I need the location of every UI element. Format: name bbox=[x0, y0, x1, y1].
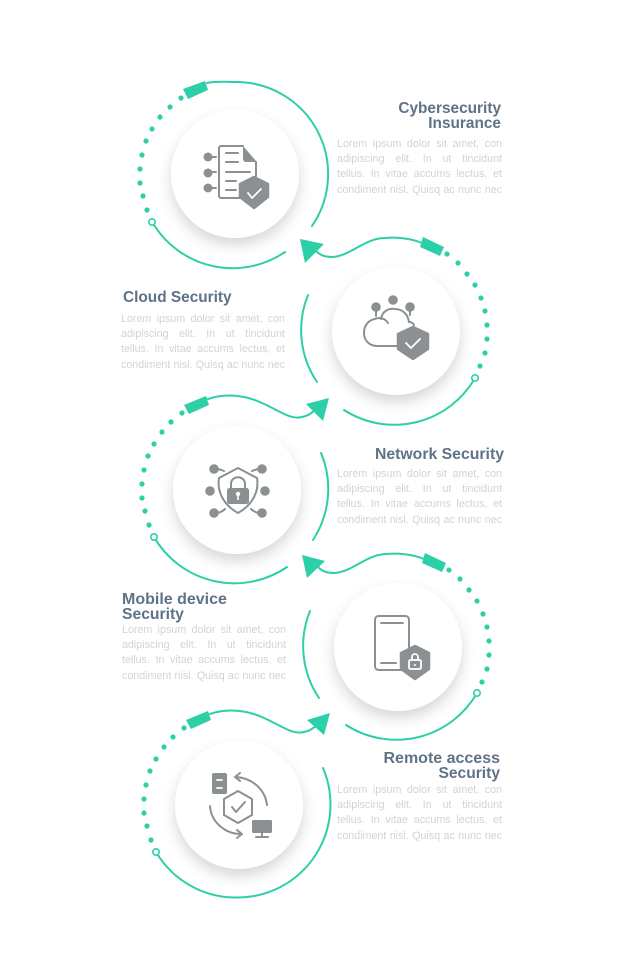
panel: cybersecurity insurance ring bbox=[137, 81, 328, 268]
text block: mobile device security: tellus. In vitae accums lectus, et bbox=[122, 654, 286, 666]
white circle bbox=[171, 110, 299, 238]
text block: cybersecurity insurance: tellus. In vitae accums lectus, et bbox=[337, 168, 502, 180]
arrow: connector to fourth ring bbox=[210, 711, 330, 735]
ring arcs bbox=[139, 396, 328, 583]
arrow: connector to first ring bbox=[300, 238, 422, 263]
panel: mobile device security ring bbox=[302, 553, 492, 740]
text block: cybersecurity insurance: condiment nisl. Quisq ac nunc nec bbox=[337, 184, 502, 196]
text block: network security: tellus. In vitae accums lectus, et bbox=[337, 498, 502, 510]
panel: cloud security ring bbox=[300, 237, 490, 425]
text block: network security bbox=[337, 466, 502, 528]
heading: cybersecurity insurance bbox=[398, 100, 501, 132]
heading: remote access security: Remote access bbox=[383, 750, 500, 767]
text block: cybersecurity insurance: Lorem ipsum dolor sit amet, con bbox=[337, 138, 502, 150]
heading: remote access security bbox=[383, 750, 500, 782]
text block: remote access security: adipiscing elit. In ut tincidunt bbox=[337, 799, 502, 811]
text block: remote access security: condiment nisl. Quisq ac nunc nec bbox=[337, 830, 502, 842]
ring arcs bbox=[137, 81, 328, 268]
white circle bbox=[175, 741, 303, 869]
panel: network security ring bbox=[139, 396, 329, 583]
text block: cybersecurity insurance: adipiscing elit. In ut tincidunt bbox=[337, 153, 502, 165]
text block: remote access security: Lorem ipsum dolor sit amet, con bbox=[337, 784, 502, 796]
text block: cloud security: Lorem ipsum dolor sit amet, con bbox=[121, 312, 285, 324]
arrow: connector to third ring bbox=[302, 554, 424, 578]
text block: cloud security: tellus. In vitae accums lectus, et bbox=[121, 343, 285, 355]
heading: remote access security: Security bbox=[438, 765, 500, 782]
text block: mobile device security bbox=[122, 622, 286, 684]
icon: shield with sync arrows bbox=[210, 773, 272, 838]
heading: cybersecurity insurance: Cybersecurity bbox=[398, 100, 501, 117]
text block: cloud security: adipiscing elit. In ut tincidunt bbox=[121, 328, 285, 340]
ring arcs bbox=[141, 711, 330, 898]
white circle bbox=[334, 583, 462, 711]
text block: cloud security bbox=[121, 312, 285, 374]
heading: network security: Network Security bbox=[375, 446, 504, 463]
ring arcs bbox=[303, 553, 492, 740]
icon: document with shield bbox=[204, 146, 268, 208]
heading: mobile device security: Mobile device bbox=[122, 591, 227, 608]
text block: mobile device security: Lorem ipsum dolor sit amet, con bbox=[122, 624, 286, 636]
icon: cloud with shield bbox=[364, 295, 428, 359]
icon: shield with padlock bbox=[205, 464, 270, 518]
heading: mobile device security: Security bbox=[122, 606, 184, 623]
heading: cybersecurity insurance: Insurance bbox=[428, 115, 501, 132]
ring arcs bbox=[301, 237, 490, 425]
text block: network security: adipiscing elit. In ut tincidunt bbox=[337, 483, 502, 495]
heading: cloud security: Cloud Security bbox=[123, 289, 232, 306]
white circle bbox=[173, 426, 301, 554]
heading: mobile device security bbox=[122, 591, 227, 623]
text block: network security: condiment nisl. Quisq ac nunc nec bbox=[337, 514, 502, 526]
text block: mobile device security: condiment nisl. Quisq ac nunc nec bbox=[122, 670, 286, 682]
text block: cybersecurity insurance bbox=[337, 136, 502, 198]
white circle bbox=[332, 267, 460, 395]
icon: phone with padlock shield bbox=[375, 616, 429, 679]
text block: remote access security: tellus. In vitae accums lectus, et bbox=[337, 814, 502, 826]
text block: network security: Lorem ipsum dolor sit amet, con bbox=[337, 468, 502, 480]
arrow: connector to second ring bbox=[208, 396, 329, 421]
text block: remote access security bbox=[337, 782, 502, 844]
text block: mobile device security: adipiscing elit. In ut tincidunt bbox=[122, 639, 286, 651]
panel: remote access security ring bbox=[141, 711, 330, 898]
text block: cloud security: condiment nisl. Quisq ac nunc nec bbox=[121, 359, 285, 371]
